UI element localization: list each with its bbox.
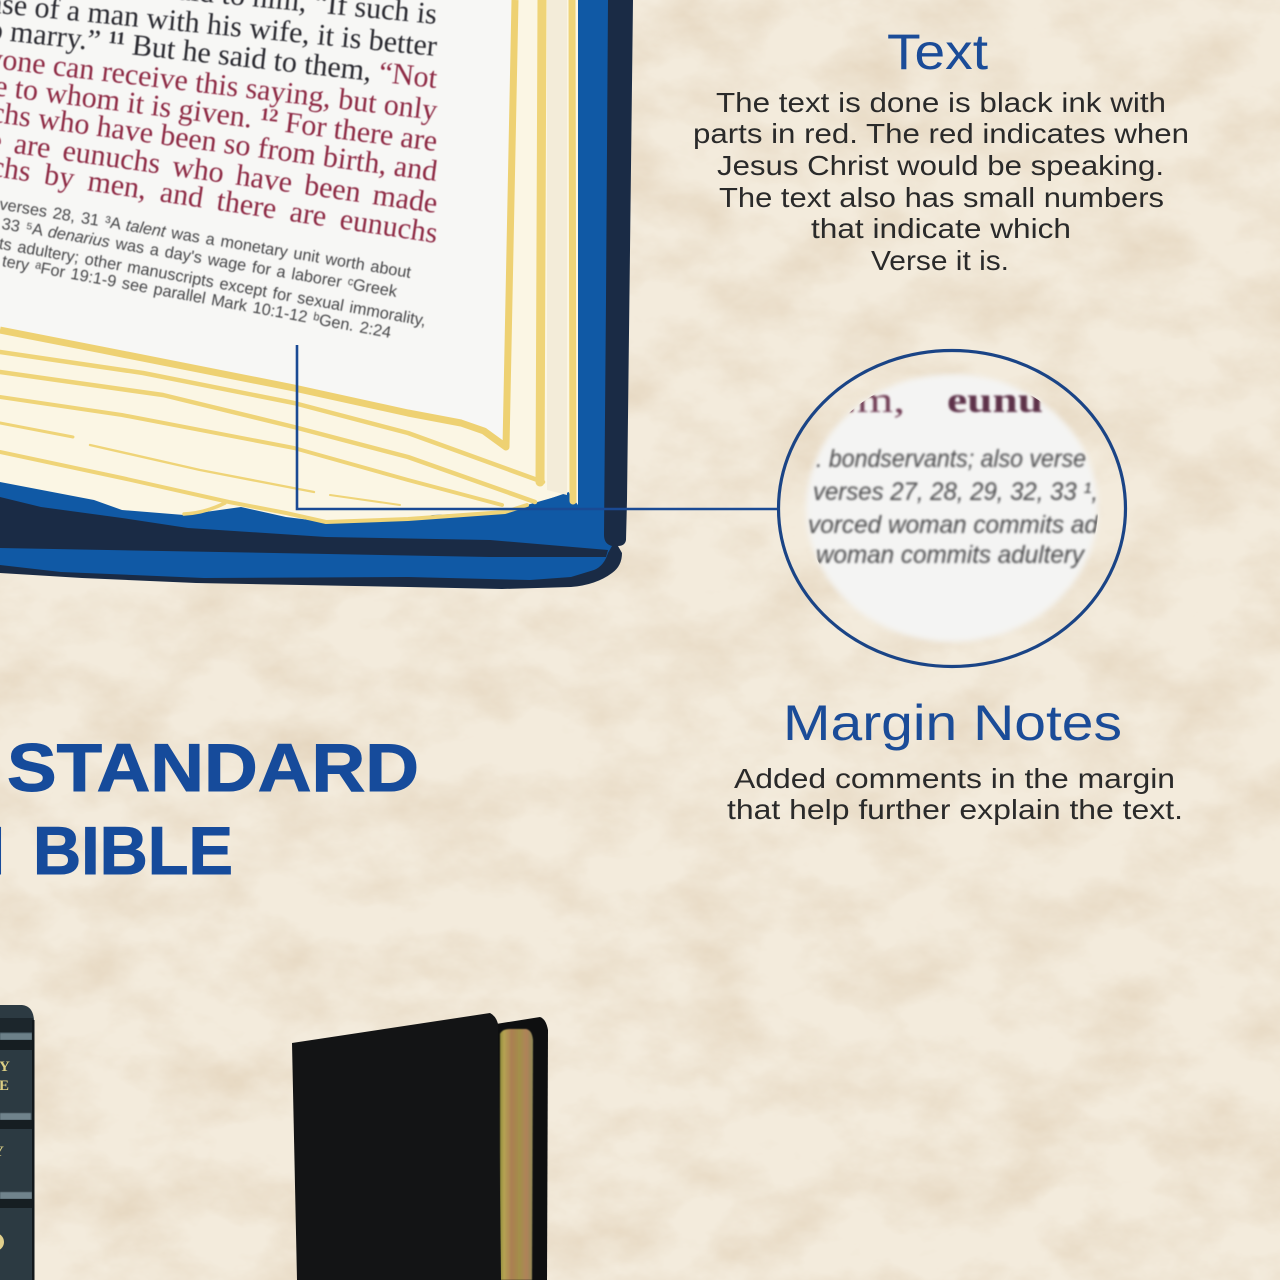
text block: Text description: The text is done is black ink with <box>716 87 1166 118</box>
heading: Margin Notes: Margin Notes <box>783 695 1122 751</box>
spine gold emblem <box>0 1233 4 1251</box>
photo: black Bible <box>292 1013 548 1280</box>
scripture text on page: For there are <box>276 105 439 158</box>
gold page edge lines <box>0 0 573 522</box>
cover dark band <box>0 497 608 557</box>
text block: Text description: The text also has small numbers <box>719 182 1164 213</box>
magnified text: vorced woman commits ad <box>808 511 1099 539</box>
scripture text on page: 11 <box>107 27 126 49</box>
footnotes on page: tery ᵃFor 19:1-9 see parallel Mark 10:1-12 ᵇGen. 2:24 <box>1 252 393 342</box>
magnified text: woman commits adultery <box>816 541 1085 569</box>
page block <box>0 0 578 522</box>
photo: leather Bible spine <box>0 1005 34 1280</box>
magnified text: eunu <box>947 380 1043 420</box>
magnified text: verses 27, 28, 29, 32, 33 ¹, <box>813 478 1098 506</box>
title: BIBLE <box>33 813 233 889</box>
text block: Text description: Verse it is. <box>871 245 1009 276</box>
magnifier circle: margin notes <box>778 350 1126 666</box>
footnotes on page: verses 28, 31 ³A talent was a monetary unit worth about <box>0 195 413 282</box>
text block: Text description: that indicate which <box>811 213 1071 244</box>
scripture text on page: 12 <box>259 104 280 126</box>
gilded page edge <box>500 1029 533 1280</box>
footnotes on page <box>0 195 428 342</box>
page edge shading <box>547 0 567 495</box>
title <box>0 730 419 889</box>
magnified text <box>808 380 1099 569</box>
text block: Margin Notes description <box>727 763 1183 825</box>
magnified text: . bondservants; also verse <box>816 445 1086 473</box>
footnotes on page: 33 ⁵A denarius was a day's wage for a laborer ᶜGreek <box>0 215 399 301</box>
illustration: open book corner <box>0 0 633 589</box>
text block: Margin Notes description: Added comments in the margin <box>734 763 1175 794</box>
book cover navy outer edge <box>0 0 633 589</box>
magnified text: .m, <box>845 380 905 420</box>
footnotes on page: its adultery; other manuscripts except for sexual immorality, <box>0 234 428 330</box>
blue wedge at page corner <box>520 492 571 515</box>
text block: Text description <box>693 87 1189 276</box>
text block: Margin Notes description: that help further explain the text. <box>727 794 1183 825</box>
book cover blue inner <box>0 0 612 580</box>
heading: Text: Text <box>887 24 988 80</box>
scripture text on page: But he said to them, <box>123 28 381 89</box>
white page <box>0 0 516 445</box>
front cover <box>292 1013 501 1280</box>
title: STANDARD <box>7 730 419 806</box>
spine gold lettering <box>0 1059 10 1160</box>
leader line: page text to margin notes circle <box>297 345 778 509</box>
gold page top edge <box>0 0 515 447</box>
scripture text on page <box>0 0 440 250</box>
text block: Text description: Jesus Christ would be speaking. <box>717 150 1164 181</box>
scripture text on page: “Not <box>377 56 440 95</box>
back cover <box>496 1017 548 1280</box>
text block: Text description: parts in red. The red indicates when <box>693 118 1189 149</box>
